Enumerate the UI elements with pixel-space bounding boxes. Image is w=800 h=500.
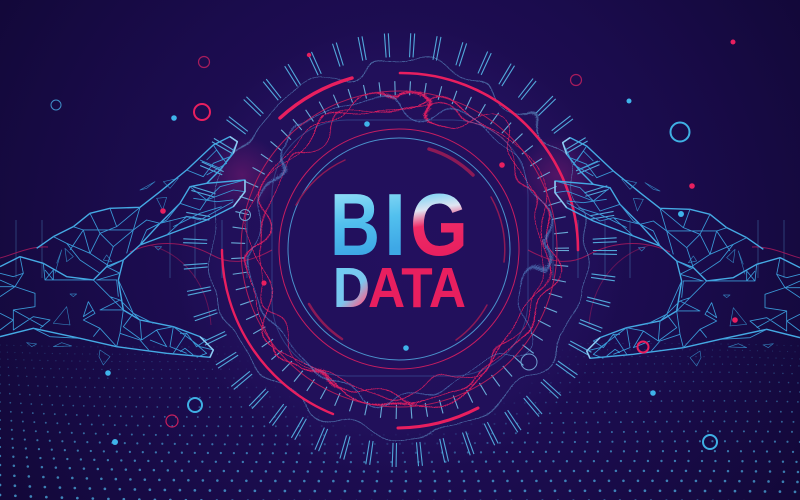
hand mesh	[0, 142, 245, 355]
BIG	[330, 175, 468, 274]
outer double tick ring	[195, 45, 605, 455]
dim inner arcs	[296, 149, 505, 340]
DATA: D	[333, 256, 370, 320]
glow behind left fingertips	[202, 135, 282, 215]
DATA	[333, 256, 466, 320]
thin wavy outer line	[214, 64, 586, 436]
radar dial	[195, 45, 605, 455]
bright thick red arcs	[222, 73, 578, 428]
central disc shading	[175, 25, 625, 475]
dotted wave floor	[0, 343, 800, 500]
BIG: G	[410, 175, 468, 274]
glow behind right fingertips	[518, 135, 598, 215]
scattered ring markers	[51, 56, 717, 449]
middle tick ring	[238, 88, 562, 412]
blue wavy data ring	[252, 100, 548, 396]
DATA: ATA	[368, 256, 466, 320]
extra mesh density	[0, 150, 233, 357]
bright fingertip strokes	[200, 137, 245, 357]
title: BIG DATA	[330, 175, 468, 320]
scattered red dots	[160, 40, 738, 323]
faint vertical scan lines	[16, 220, 784, 278]
left polygon hand	[0, 137, 245, 365]
hand outline	[0, 137, 245, 357]
scattered blue dots	[105, 98, 684, 445]
wavy red data rings	[250, 98, 550, 398]
BIG: B	[330, 175, 380, 274]
floating triangles	[27, 178, 178, 365]
concentric thin rings	[241, 91, 557, 407]
BIG: I	[384, 175, 406, 274]
right polygon hand	[555, 138, 800, 366]
faint red waves behind hands	[0, 244, 800, 325]
blue rounded square	[272, 120, 528, 376]
